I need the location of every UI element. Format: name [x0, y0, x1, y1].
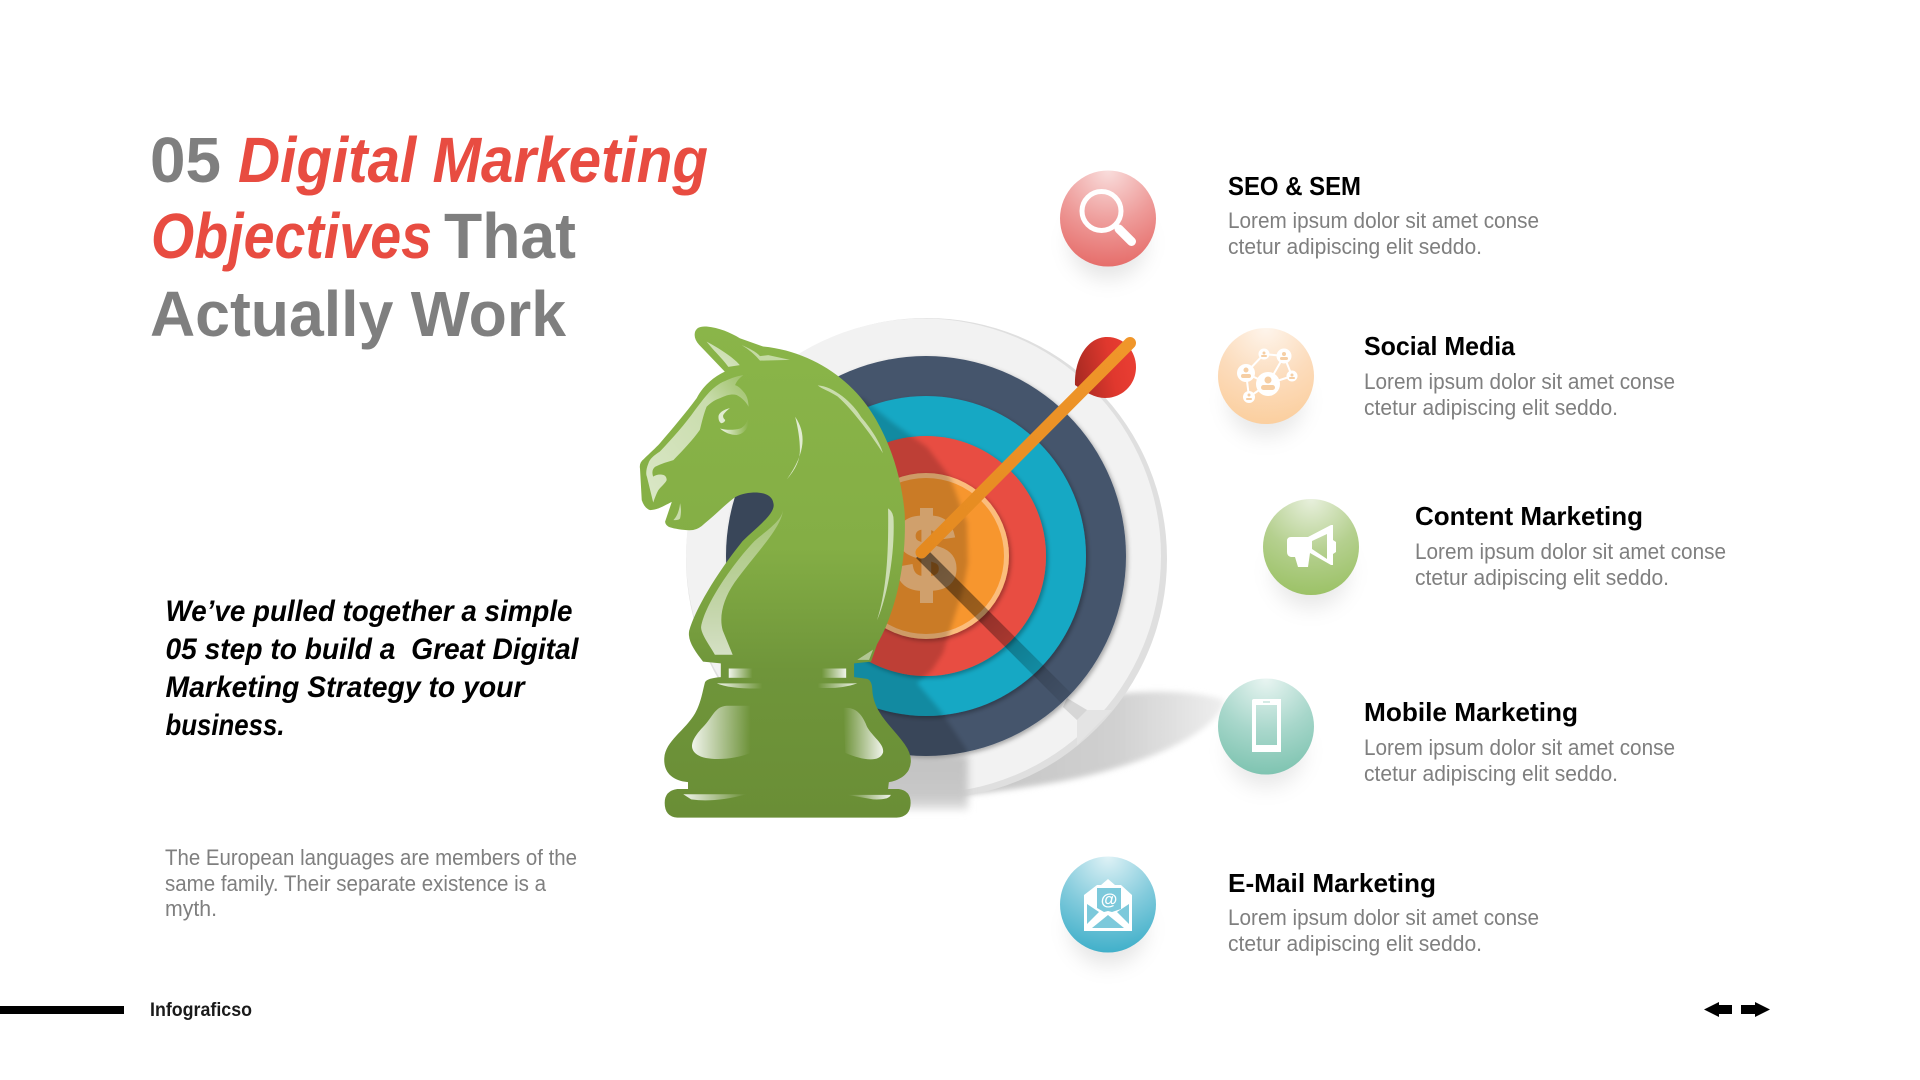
arrow fletching — [1075, 337, 1136, 398]
arrow: next — [1741, 1002, 1770, 1017]
knight highlights — [646, 342, 894, 800]
text: Mobile Marketing — [1364, 697, 1675, 786]
target outer disc — [686, 318, 1167, 799]
text: SEO & SEM: Lorem ipsum dolor sit amet conse — [1228, 208, 1539, 233]
knight chess piece — [640, 326, 911, 818]
text: Social Media: Social Media — [1364, 331, 1516, 361]
icon: phone — [1218, 678, 1314, 787]
item: E-Mail Marketing — [1060, 856, 1539, 965]
text: SEO & SEM: ctetur adipiscing elit seddo. — [1228, 234, 1482, 259]
target rings — [726, 356, 1126, 756]
text: Mobile Marketing: Lorem ipsum dolor sit amet conse — [1364, 735, 1675, 760]
title: 05 — [150, 124, 221, 196]
text: Content Marketing: ctetur adipiscing elit seddo. — [1415, 565, 1669, 590]
text: Content Marketing: Lorem ipsum dolor sit amet conse — [1415, 539, 1726, 564]
arrow shaft — [922, 343, 1130, 552]
icon: megaphone — [1263, 499, 1359, 608]
item: SEO & SEM — [1060, 170, 1539, 279]
arrow shadow — [921, 553, 1068, 700]
text: Social Media — [1364, 331, 1675, 420]
title: That — [444, 200, 576, 272]
text: SEO & SEM: SEO & SEM — [1228, 171, 1361, 201]
dollar sign: $ — [896, 492, 956, 613]
icon: network — [1218, 328, 1314, 437]
title — [150, 124, 708, 350]
icon: envelope: @ — [1101, 890, 1117, 909]
floor shadow — [860, 692, 1224, 800]
subheading: business. — [166, 709, 284, 742]
shadow under knight — [860, 755, 968, 810]
text: E-Mail Marketing: ctetur adipiscing elit seddo. — [1228, 931, 1482, 956]
knight body — [640, 326, 911, 818]
body paragraph: myth. — [165, 896, 217, 921]
title: Actually Work — [150, 278, 566, 350]
text: Social Media: Lorem ipsum dolor sit amet conse — [1364, 369, 1675, 394]
text: Content Marketing — [1415, 501, 1726, 590]
title: Objectives — [151, 200, 432, 272]
text: SEO & SEM — [1228, 171, 1539, 259]
footer brand: Infograficso — [150, 1000, 252, 1021]
text: E-Mail Marketing: Lorem ipsum dolor sit amet conse — [1228, 905, 1539, 930]
icon: magnifier — [1060, 170, 1156, 279]
icon: envelope — [1060, 856, 1156, 965]
subheading: 05 step to build a Great Digital — [166, 633, 579, 666]
footer bar — [0, 1006, 124, 1014]
arrow: previous — [1704, 1002, 1732, 1017]
item: Social Media — [1218, 328, 1675, 437]
text: Mobile Marketing: Mobile Marketing — [1364, 697, 1578, 727]
title: Digital Marketing — [238, 124, 708, 196]
text: Social Media: ctetur adipiscing elit seddo. — [1364, 395, 1618, 420]
item: Mobile Marketing — [1218, 678, 1675, 787]
body paragraph — [165, 845, 577, 921]
item: Content Marketing — [1263, 499, 1726, 608]
text: Content Marketing: Content Marketing — [1415, 501, 1643, 531]
subheading: We’ve pulled together a simple — [166, 595, 572, 628]
text: Mobile Marketing: ctetur adipiscing elit seddo. — [1364, 761, 1618, 786]
target illustration — [686, 318, 1224, 820]
body paragraph: The European languages are members of the — [165, 845, 577, 870]
target stand — [1063, 698, 1112, 745]
text: E-Mail Marketing: E-Mail Marketing — [1228, 868, 1436, 898]
subheading: Marketing Strategy to your — [166, 671, 527, 704]
text: E-Mail Marketing — [1228, 868, 1539, 956]
subheading — [166, 595, 579, 742]
body paragraph: same family. Their separate existence is a — [165, 871, 547, 896]
knight shadow on target — [726, 398, 970, 756]
